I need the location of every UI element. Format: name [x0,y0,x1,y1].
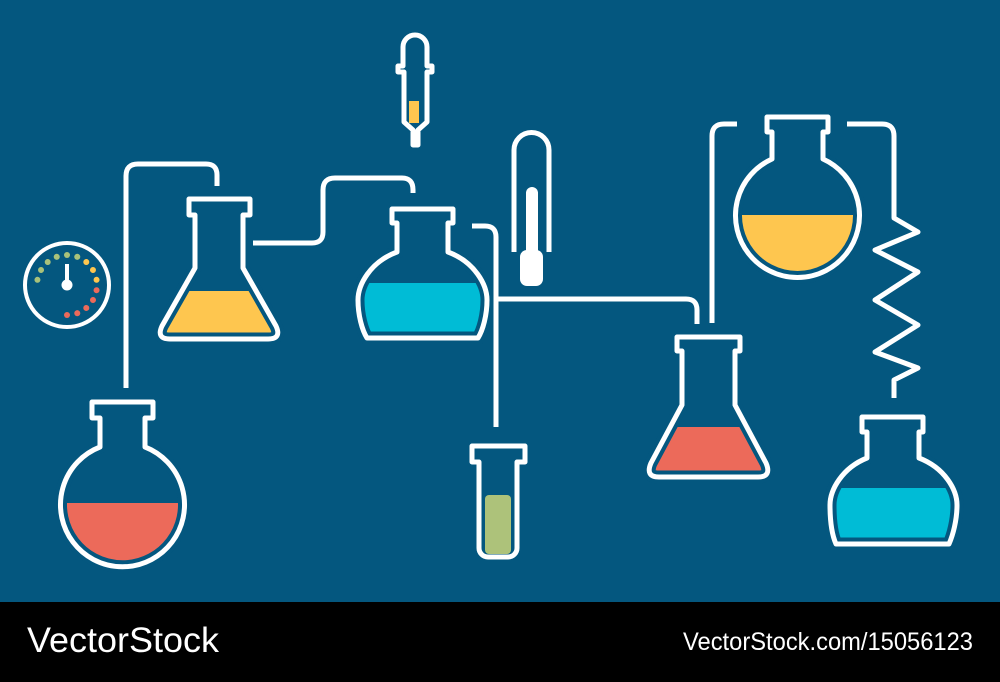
tube: coil condenser [847,124,918,398]
tube: branch to red flask [496,299,697,324]
flask: blue round middle [358,209,487,338]
footer bar [0,602,1000,682]
test tube: green [472,446,525,557]
icon: dropper [398,35,432,145]
icon: thermometer [514,132,549,286]
tube: red flask to top flask [712,124,737,323]
footer: url: VectorStock.com/15056123 [683,628,973,656]
flask: blue round bottom-right [830,417,957,544]
footer: brand: VectorStock [27,621,220,660]
tube: left flask to yellow flask [126,164,217,388]
flask: yellow round top-right [735,117,860,278]
icon: gauge [25,243,109,327]
tube: yellow flask to blue flask [253,178,413,243]
tube: blue flask to test tube [472,226,496,427]
flask: yellow erlenmeyer [160,199,278,339]
flask: red round bottom-left [60,402,184,567]
flask: red erlenmeyer [649,337,768,477]
